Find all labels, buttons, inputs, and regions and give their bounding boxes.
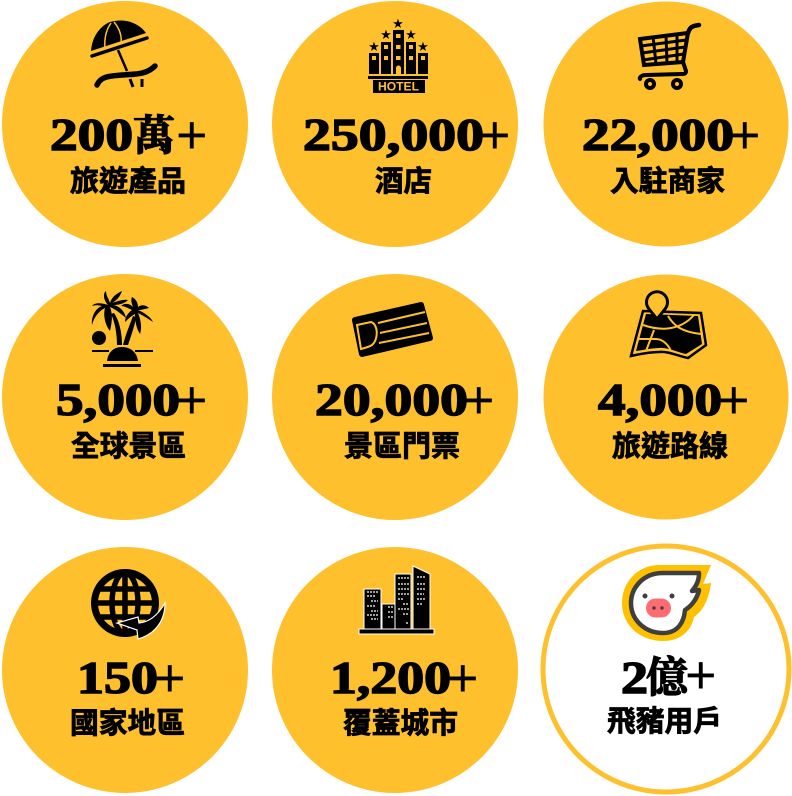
number: 150 — [77, 652, 158, 703]
number: + — [685, 645, 717, 705]
label: 國家地區 — [70, 707, 185, 740]
icon: hotel: ★ — [417, 40, 429, 55]
number: 22,000 — [582, 109, 734, 160]
number: + — [154, 648, 186, 708]
number: + — [718, 370, 750, 430]
panel: merchants — [544, 2, 788, 246]
icon: hotel: ★ — [405, 28, 417, 43]
circle background — [544, 274, 788, 520]
circle background — [2, 547, 248, 793]
label: 覆蓋城市 — [343, 707, 458, 740]
icon: hotel — [368, 17, 429, 94]
number: + — [176, 105, 208, 165]
number — [56, 370, 208, 430]
icon: shopping cart — [640, 25, 699, 88]
label: 旅遊產品 — [70, 165, 186, 198]
label: 全球景區 — [71, 430, 186, 463]
icon: Fliggy pig logo — [622, 565, 711, 641]
panel: travel products — [2, 1, 248, 247]
number: + — [479, 105, 511, 165]
icon: ticket — [355, 305, 430, 354]
panel: global attractions — [2, 274, 248, 520]
number: + — [463, 370, 495, 430]
panel: hotels — [272, 1, 518, 247]
number — [50, 105, 208, 165]
icon: hotel: ★ — [392, 17, 404, 32]
circle background — [544, 2, 788, 246]
icon: beach umbrella and lounger — [91, 20, 155, 87]
panel: cities — [272, 547, 518, 793]
icon: city skyline — [359, 566, 434, 634]
icon: hotel: ★ — [380, 28, 392, 43]
circle background — [272, 547, 518, 793]
number — [582, 105, 761, 165]
number: 5,000 — [56, 374, 180, 425]
label: 景區門票 — [344, 431, 460, 463]
number — [621, 645, 717, 705]
number: + — [447, 648, 479, 708]
panel: countries — [2, 547, 248, 793]
icon: map with pin — [631, 292, 706, 358]
number: + — [176, 370, 208, 430]
circle background — [2, 1, 248, 247]
circle background — [272, 1, 518, 247]
number: 2 — [621, 652, 648, 703]
number: 1,200 — [330, 652, 451, 703]
label: 酒店 — [375, 165, 432, 198]
number — [77, 648, 186, 708]
label: 飛豬用戶 — [607, 705, 722, 738]
panel: attraction tickets — [272, 274, 518, 520]
icon: palm island — [92, 291, 153, 367]
number: 200 — [50, 109, 133, 160]
label: 入駐商家 — [610, 165, 725, 198]
number: 億 — [646, 655, 691, 702]
label: 旅遊路線 — [612, 430, 728, 463]
circle background — [272, 274, 518, 520]
icon: hotel: ★ — [368, 40, 380, 55]
number — [315, 370, 495, 430]
icon: globe with arrow — [91, 569, 165, 639]
number — [330, 648, 479, 708]
number — [303, 105, 511, 165]
number — [598, 370, 750, 430]
icon: hotel: HOTEL — [378, 82, 419, 94]
number: 4,000 — [598, 374, 722, 425]
circle background — [2, 274, 248, 520]
number: 250,000 — [303, 109, 484, 160]
number: 萬 — [133, 113, 175, 160]
panel: Fliggy users — [543, 546, 789, 792]
circle outline — [543, 546, 789, 792]
panel: travel routes — [544, 274, 788, 520]
number: + — [729, 105, 761, 165]
number: 20,000 — [315, 374, 468, 425]
